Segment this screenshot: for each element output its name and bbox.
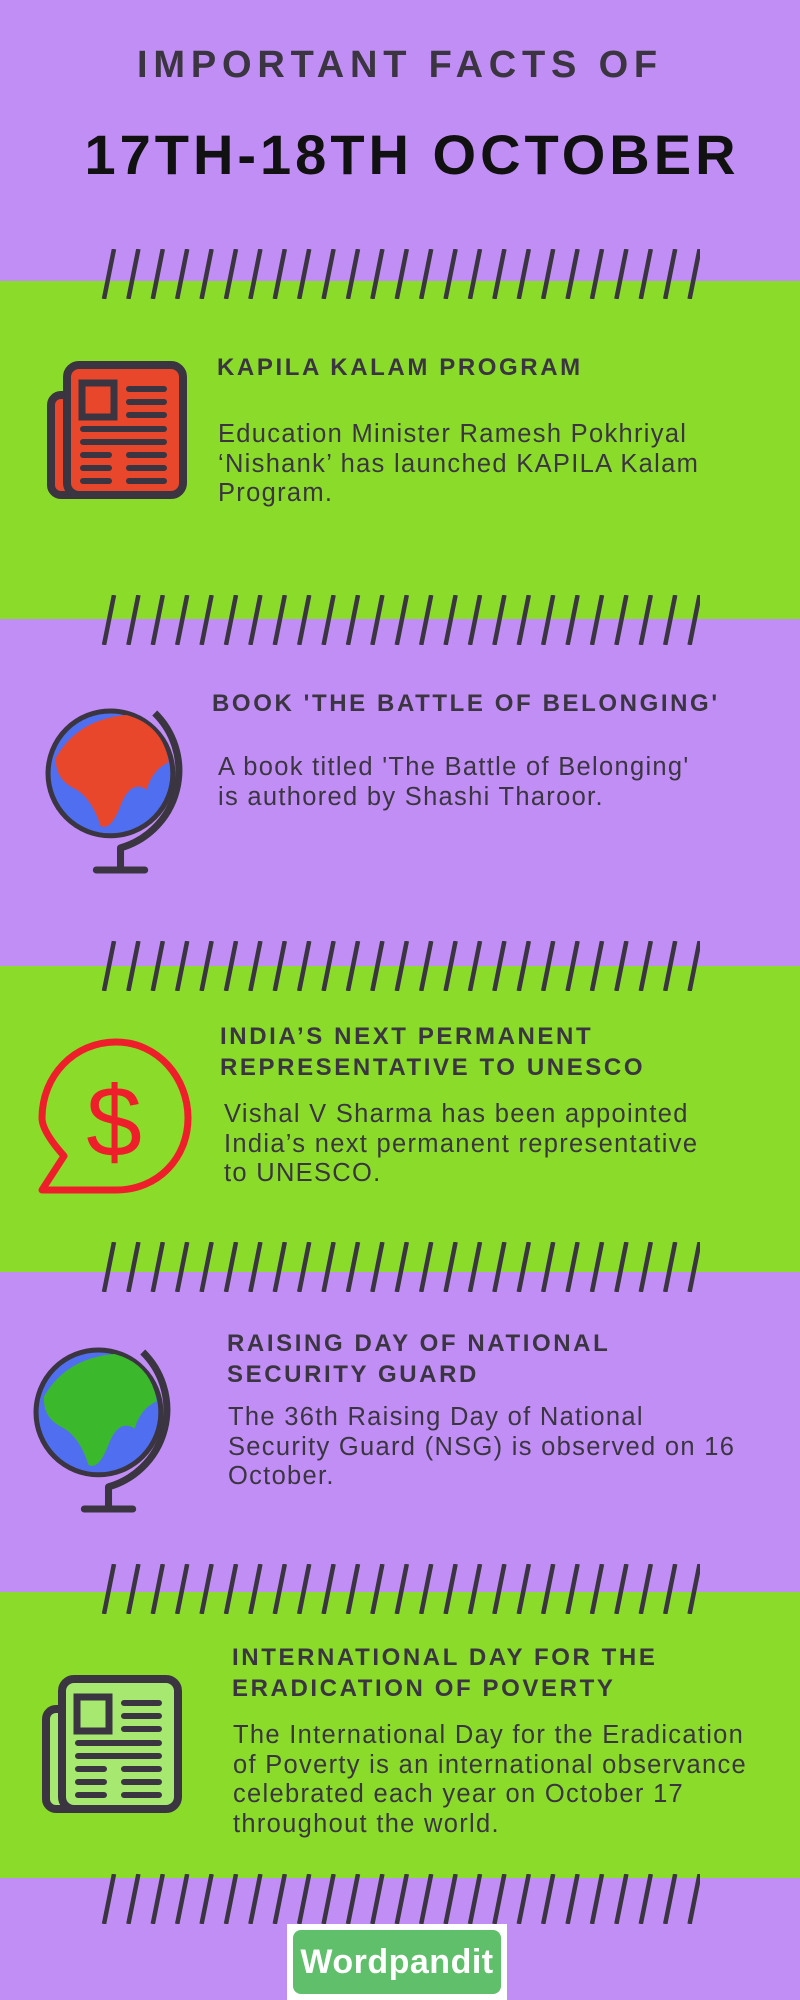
body text: ‘Nishank’ has launched KAPILA Kalam (218, 450, 699, 478)
panel: battle of belonging (46, 690, 720, 874)
icon: newspaper green (42, 1675, 182, 1813)
heading (220, 1023, 645, 1081)
heading: INDIA’S NEXT PERMANENT (220, 1023, 593, 1050)
body text: Program. (218, 479, 333, 507)
icon: newspaper red (47, 361, 187, 499)
heading: SECURITY GUARD (227, 1361, 479, 1388)
body text (228, 1403, 735, 1490)
body text (233, 1721, 747, 1838)
icon: dollar speech bubble (38, 1038, 192, 1194)
body text (224, 1100, 698, 1187)
icon: globe green (34, 1348, 170, 1512)
panel: kapila kalam (47, 354, 699, 507)
logo: wordpandit: Wordpandit (300, 1943, 494, 1981)
body text: to UNESCO. (224, 1159, 382, 1187)
heading: KAPILA KALAM PROGRAM (217, 354, 583, 381)
body text: Education Minister Ramesh Pokhriyal (218, 420, 687, 448)
body text (218, 420, 699, 507)
body text: is authored by Shashi Tharoor. (218, 782, 604, 810)
icon: dollar speech bubble: $ (86, 1066, 142, 1178)
body text: The 36th Raising Day of National (228, 1403, 644, 1431)
panel: unesco representative (38, 1023, 698, 1194)
heading: REPRESENTATIVE TO UNESCO (220, 1054, 645, 1081)
body text: Security Guard (NSG) is observed on 16 (228, 1432, 735, 1460)
body text: A book titled 'The Battle of Belonging' (218, 753, 690, 781)
heading: ERADICATION OF POVERTY (232, 1675, 615, 1702)
body text (218, 753, 690, 810)
panel: eradication of poverty (42, 1644, 747, 1838)
subtitle date: 17TH-18TH OCTOBER (84, 123, 740, 186)
body text: of Poverty is an international observance (233, 1750, 747, 1778)
heading (227, 1330, 610, 1388)
title: IMPORTANT FACTS OF (137, 44, 663, 86)
heading: INTERNATIONAL DAY FOR THE (232, 1644, 657, 1671)
heading: BOOK 'THE BATTLE OF BELONGING' (212, 690, 720, 717)
icon: globe red (46, 708, 182, 874)
body text: celebrated each year on October 17 (233, 1780, 684, 1808)
panel: NSG raising day (34, 1330, 735, 1512)
body text: throughout the world. (233, 1810, 500, 1838)
heading: RAISING DAY OF NATIONAL (227, 1330, 610, 1357)
logo: wordpandit (287, 1924, 507, 2000)
body text: The International Day for the Eradication (233, 1721, 744, 1749)
body text: Vishal V Sharma has been appointed (224, 1100, 689, 1128)
heading (232, 1644, 657, 1702)
body text: October. (228, 1462, 335, 1490)
body text: India’s next permanent representative (224, 1130, 698, 1158)
